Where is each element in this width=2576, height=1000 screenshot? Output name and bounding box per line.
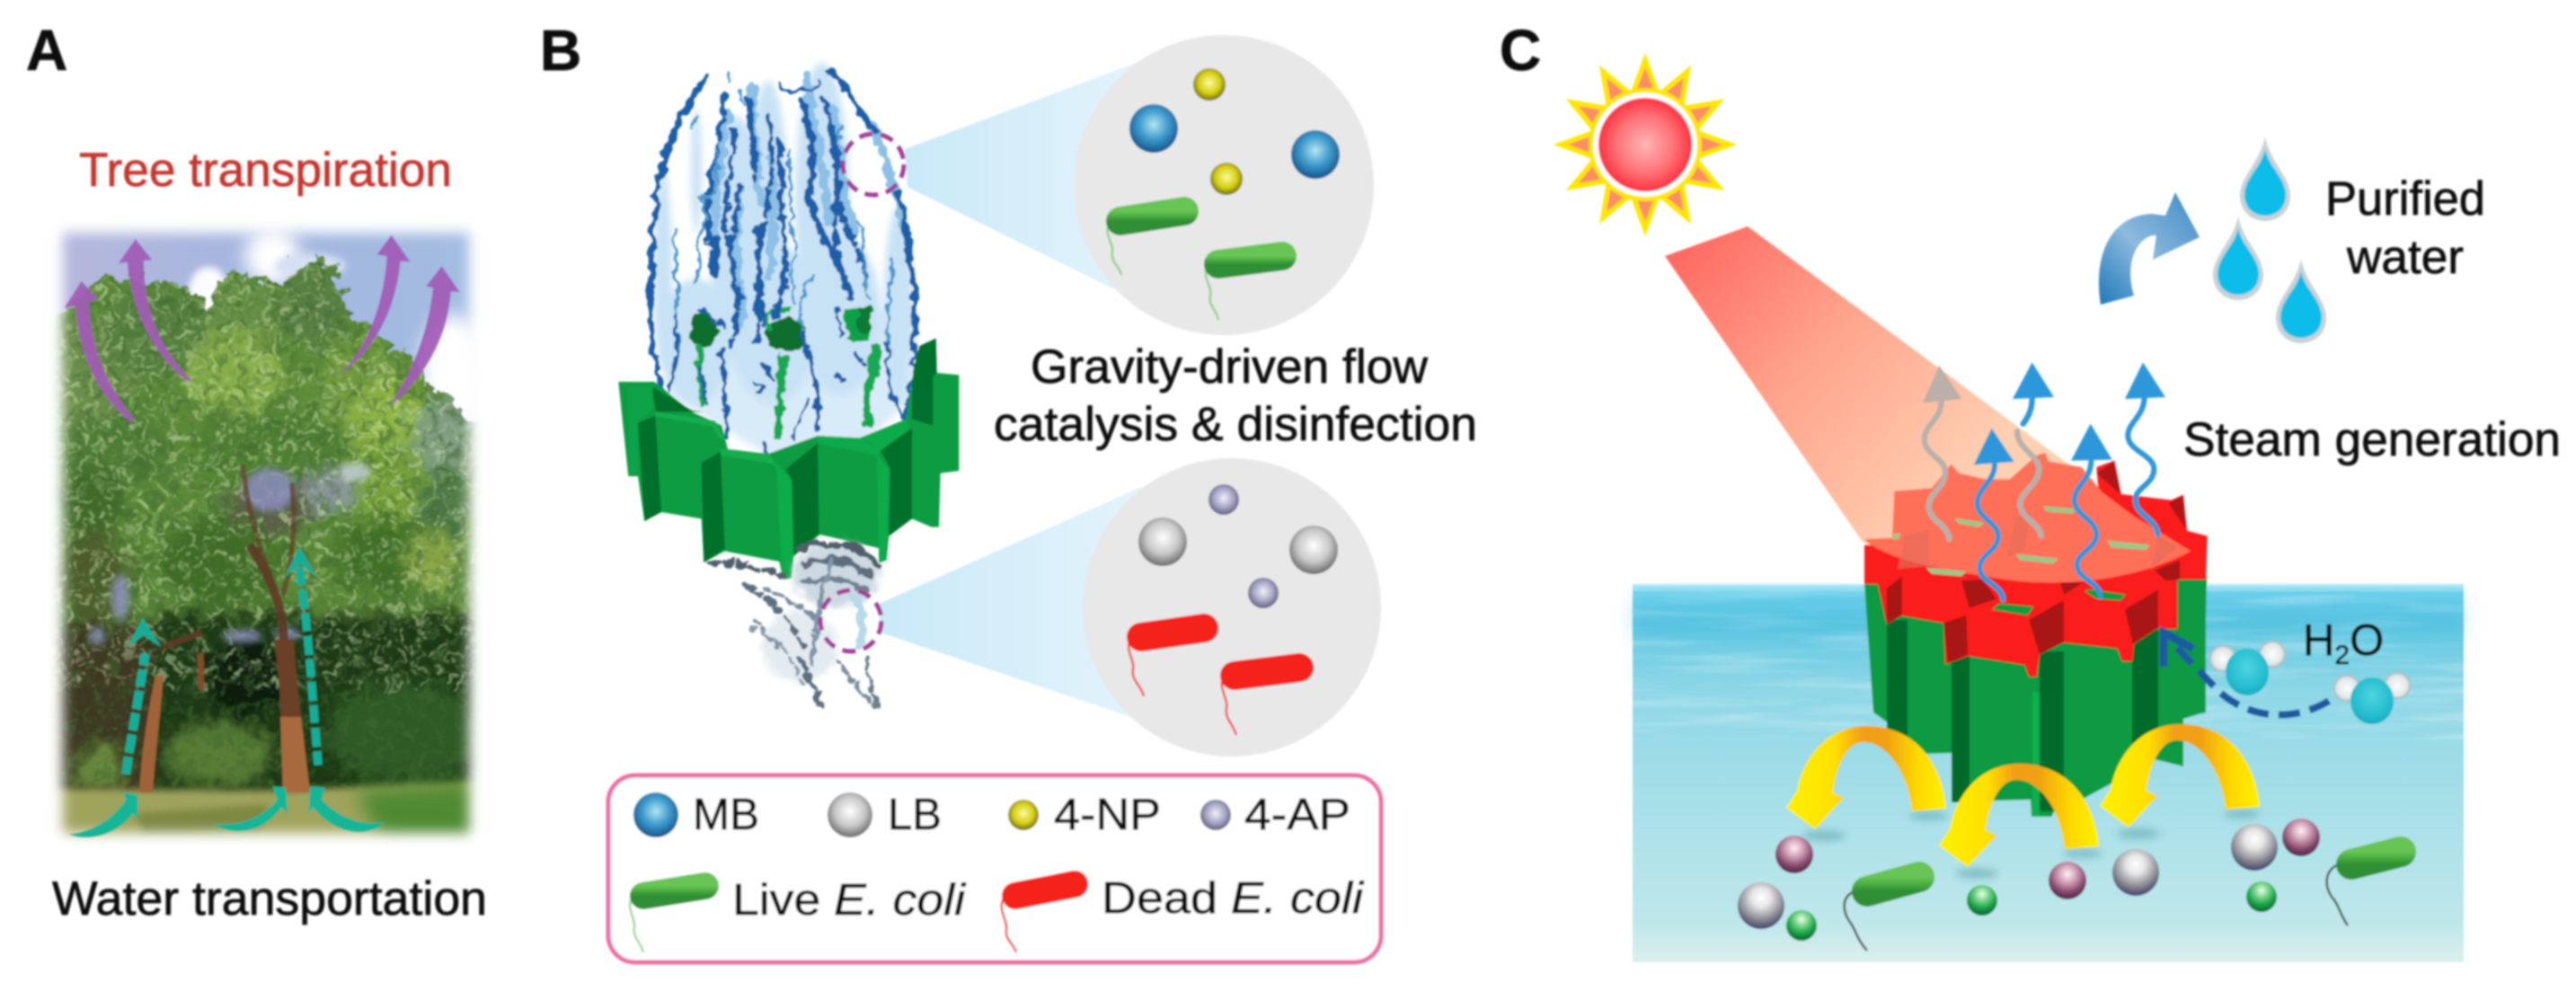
legend: dead E. coli: Dead E. coli	[1102, 874, 1364, 923]
caption: gravity-driven flow	[994, 341, 1477, 451]
water flow above the catalyst	[651, 63, 916, 458]
canopy and undergrowth	[52, 253, 480, 796]
legend: 4-NP: 4-NP	[1054, 791, 1161, 839]
legend: dead E. coli	[1002, 874, 1364, 952]
dashed water uptake arrow	[2164, 633, 2329, 715]
legend: LB: LB	[888, 791, 942, 839]
zoom cone upper	[905, 59, 1146, 289]
purified water drops	[2213, 137, 2326, 343]
caption: gravity-driven flow: Gravity-driven flow	[1031, 341, 1429, 394]
grass	[49, 782, 485, 849]
H2O label: 2	[2334, 641, 2350, 670]
purple transpiration arrows	[65, 235, 460, 422]
bacterium left	[1845, 877, 1919, 951]
salmon sunlit surface	[1864, 453, 2191, 582]
teal water transport arrows	[69, 546, 385, 837]
dashed magnifier ring lower	[820, 590, 881, 651]
caption: gravity-driven flow: catalysis & disinfection	[994, 398, 1477, 451]
green dye patches	[690, 307, 876, 440]
panel letter B: B	[540, 18, 581, 83]
steam arrow, upper middle	[2013, 362, 2054, 536]
panel A: tree transpiration	[26, 18, 503, 925]
H2O label: O	[2350, 616, 2384, 665]
blue water streams	[651, 70, 915, 454]
legend: live E. coli	[630, 876, 966, 952]
green device body	[1864, 575, 2207, 817]
steam arrows rising from device	[1923, 362, 2165, 599]
water molecule upper	[2209, 641, 2286, 695]
yellow circulation arrows	[1786, 724, 2260, 867]
label: purified water: Purified	[2325, 173, 2485, 226]
red photothermal top of device	[1864, 453, 2208, 716]
sun icon	[1554, 53, 1737, 236]
green catalyst scaffold	[618, 339, 959, 580]
bacterium right	[2327, 852, 2401, 925]
steam arrow, blue right	[2125, 362, 2165, 535]
sky showing through the foliage	[90, 463, 371, 645]
panel C: solar steam generation	[1500, 18, 2561, 962]
panel letter A: A	[26, 18, 67, 83]
sunlight beam	[1665, 226, 2120, 575]
water molecule lower	[2333, 672, 2411, 724]
caption: water transportation: Water transportation	[52, 872, 487, 925]
H2O label: H	[2303, 616, 2334, 665]
tree trunks and branches	[166, 467, 294, 687]
panel letter C: C	[1500, 18, 1541, 83]
pollutant molecules	[1738, 819, 2320, 941]
arrow shadows	[1802, 810, 2260, 879]
dashed magnifier ring upper	[843, 134, 904, 195]
label: steam generation: Steam generation	[2183, 413, 2561, 466]
residual water below the catalyst	[710, 543, 879, 710]
legend: 4-AP	[1200, 791, 1350, 839]
heading: tree transpiration: Tree transpiration	[79, 144, 452, 197]
tree photograph	[52, 225, 480, 844]
recycling arrow	[2099, 192, 2200, 305]
legend box	[608, 775, 1381, 962]
steam arrow, blue centre left	[1974, 429, 2014, 599]
sea background	[1633, 584, 2464, 962]
magnified circle: before treatment	[1074, 35, 1374, 335]
label: purified water	[2325, 173, 2485, 284]
legend: MB	[633, 791, 759, 839]
steam arrow, blue centre right	[2071, 424, 2112, 597]
label: purified water: water	[2346, 231, 2464, 284]
panel B: gravity-driven flow catalysis and disinfection	[540, 18, 1477, 962]
legend: live E. coli: Live E. coli	[732, 876, 966, 925]
legend: 4-AP: 4-AP	[1244, 791, 1350, 839]
steam arrow, grey left	[1923, 366, 1961, 539]
zoom cone lower	[879, 487, 1141, 717]
legend: MB: MB	[693, 791, 759, 839]
legend: LB	[828, 791, 942, 839]
legend: 4-NP	[1008, 791, 1161, 839]
magnified circle: after treatment	[1083, 458, 1381, 757]
